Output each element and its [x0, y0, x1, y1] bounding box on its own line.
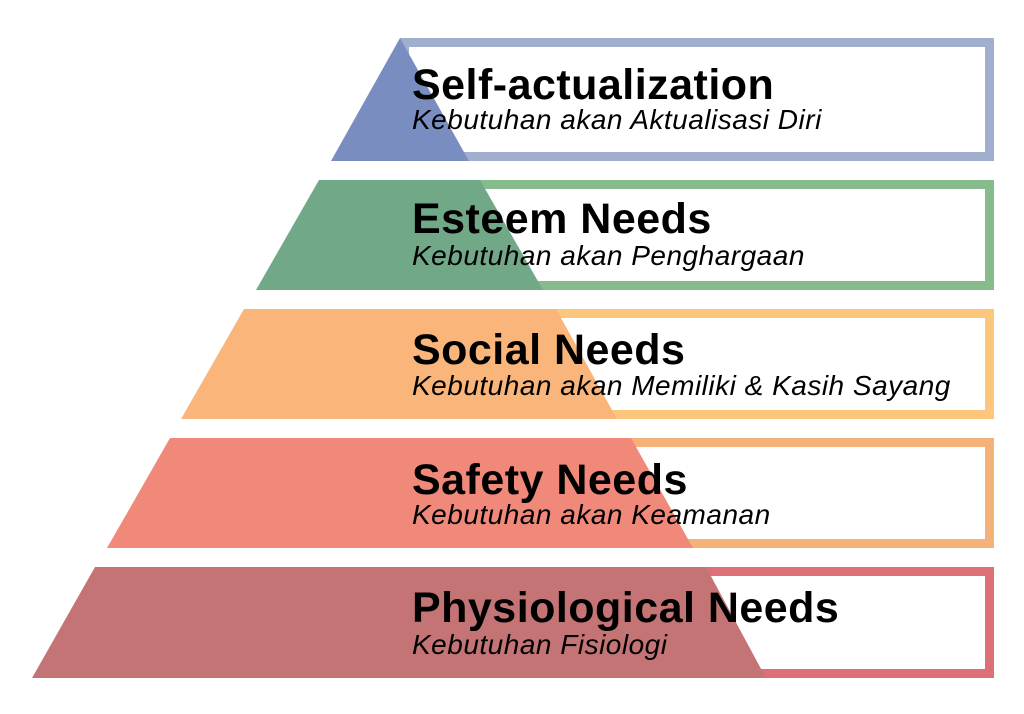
subtitle: Kebutuhan akan Penghargaan: Kebutuhan akan Penghargaan [412, 240, 805, 271]
pyramid segment: physiological [32, 567, 766, 678]
pyramid segment: esteem [256, 180, 543, 290]
panel: esteem needs level [256, 180, 990, 290]
outline box: physiological [404, 572, 990, 674]
panel: social needs level [181, 309, 990, 419]
heading: Self-actualization: Self-actualization [412, 61, 774, 109]
panel: physiological needs level [32, 567, 990, 678]
heading: Safety Needs: Safety Needs [412, 456, 688, 504]
pyramid segment: social [181, 309, 617, 419]
pyramid segment: self-actualization [331, 38, 469, 161]
panel: safety needs level [107, 438, 990, 548]
outline box: safety [404, 442, 990, 544]
pyramid segment: safety [107, 438, 693, 548]
subtitle: Kebutuhan akan Memiliki & Kasih Sayang: Kebutuhan akan Memiliki & Kasih Sayang [412, 370, 951, 401]
subtitle: Kebutuhan akan Aktualisasi Diri: Kebutuhan akan Aktualisasi Diri [412, 104, 822, 135]
outline box: esteem [404, 184, 990, 286]
subtitle: Kebutuhan akan Keamanan: Kebutuhan akan Keamanan [412, 499, 771, 530]
panel: self-actualization level [331, 38, 990, 161]
subtitle: Kebutuhan Fisiologi: Kebutuhan Fisiologi [412, 629, 668, 660]
outline box: social [404, 314, 990, 414]
heading: Esteem Needs: Esteem Needs [412, 195, 712, 243]
outline box: self-actualization [404, 42, 990, 156]
heading: Social Needs: Social Needs [412, 326, 685, 374]
heading: Physiological Needs: Physiological Needs [412, 584, 839, 632]
